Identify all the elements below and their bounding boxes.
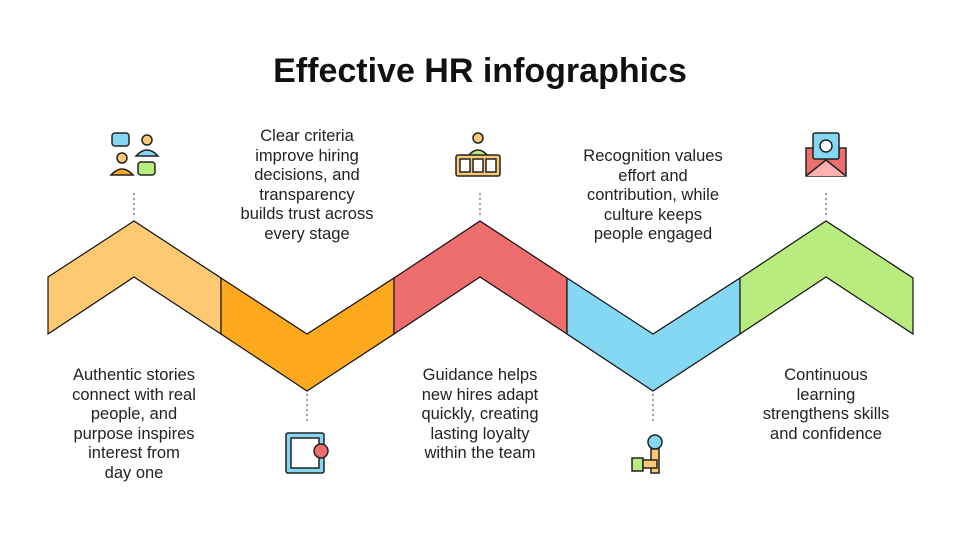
text 3: quickly, creating [421,405,539,423]
text 2: builds trust across [241,205,373,223]
segment 4 blue [567,278,740,391]
text 4: effort and [618,166,688,184]
text 4: Recognition values [583,147,723,165]
text 1: day one [105,464,163,482]
text 3: lasting loyalty [430,424,530,442]
text 4 [583,147,723,243]
segment 3 red [394,221,567,334]
icon: award hand [632,435,662,473]
text 3: Guidance helps [423,366,537,384]
text 3: within the team [424,444,535,462]
dotted connectors [134,193,826,422]
segment 5 green [740,221,913,334]
segment 1 yellow [48,221,221,334]
text 1: interest from [88,444,180,462]
text 5: strengthens skills [763,405,889,423]
icon: scoreboard [456,133,500,176]
text 1 [72,366,196,482]
text 4: culture keeps [604,206,702,224]
icon: mail [806,133,846,176]
text 5: Continuous [784,366,868,384]
text 2: every stage [264,224,350,242]
text 1: connect with real [72,386,196,404]
text 2 [241,127,373,242]
text 5: learning [797,386,855,404]
text 1: purpose inspires [73,424,195,442]
text 4: people engaged [594,225,712,243]
text 5 [763,366,889,442]
segment 2 orange [221,278,394,391]
text 3 [421,366,539,462]
zigzag band [48,221,913,391]
text 1: Authentic stories [73,366,195,384]
text 2: Clear criteria [260,127,354,145]
text 2: transparency [259,186,355,204]
text 1: people, and [91,405,177,423]
icon: certificate [286,433,328,473]
text 2: improve hiring [255,146,359,164]
icon: interview [111,133,158,175]
text 4: contribution, while [587,186,719,204]
title: Effective HR infographics [273,52,687,90]
text 5: and confidence [770,424,882,442]
text 3: new hires adapt [422,386,538,404]
text 2: decisions, and [254,166,360,184]
